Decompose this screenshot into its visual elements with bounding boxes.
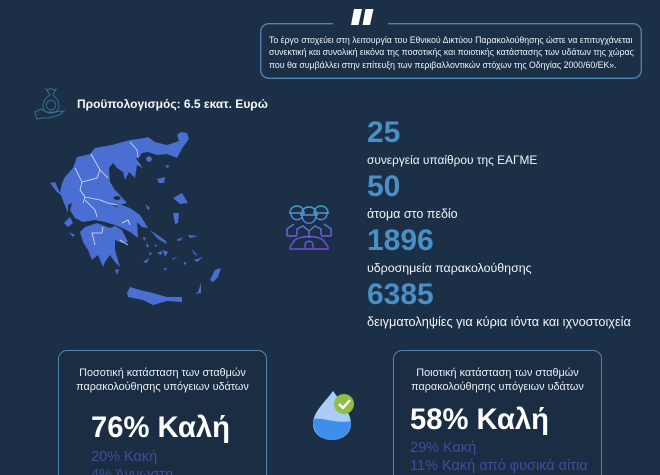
panel: quantitative status [58, 350, 267, 475]
Lemnos [157, 177, 165, 183]
secondary figures [91, 449, 173, 475]
number 50: 50 [367, 170, 400, 203]
icon: money bag in hand [34, 88, 66, 120]
panel heading: παρακολούθησης υπόγειων υδάτων [76, 381, 249, 393]
Lefkada and Kefalonia [64, 217, 73, 227]
Crete [127, 287, 182, 305]
panel heading [411, 367, 584, 393]
label: υδροσημεία παρακολούθησης [367, 261, 532, 275]
panel heading [76, 367, 249, 393]
number 6385: 6385 [367, 278, 434, 311]
panel heading: παρακολούθησης υπόγειων υδάτων [411, 381, 584, 393]
quote panel [260, 23, 642, 79]
panel outline [260, 23, 642, 79]
icon: field crew [286, 205, 332, 250]
stat: monitoring water points [367, 224, 532, 275]
label: συνεργεία υπαίθρου της ΕΑΓΜΕ [367, 153, 537, 167]
stat: people in field [367, 170, 458, 221]
map of Greece [50, 132, 221, 305]
mainland [60, 132, 189, 238]
Thasos [146, 156, 152, 162]
main figure: 76% Καλή [91, 412, 230, 444]
number 1896: 1896 [367, 224, 434, 257]
budget heading: Προϋπολογισμός: 6.5 εκατ. Ευρώ [77, 97, 268, 111]
main figure: 58% Καλή [410, 404, 549, 436]
quote text [269, 34, 634, 70]
Kythira [115, 269, 119, 275]
label: άτομα στο πεδίο [367, 207, 458, 221]
secondary figures [410, 440, 588, 474]
secondary figures: 29% Κακή [410, 440, 476, 456]
quote text: Το έργο στοχεύει στη λειτουργία του Εθνικού Δικτύου Παρακολούθησης ώστε να επιτυγχάνεται [269, 34, 632, 44]
Zakynthos [69, 232, 75, 237]
quote text: συνεκτική και συνολική εικόνα της ποσοτικής και ποιοτικής κατάστασης των υδάτων της χώρας [269, 47, 634, 57]
stat: field teams [367, 116, 537, 167]
Aegean islands [165, 165, 170, 168]
icon: quotation mark [351, 9, 374, 25]
panel heading: Ποιοτική κατάσταση των σταθμών [416, 367, 579, 379]
secondary figures: 11% Κακή από φυσικά αίτια [410, 458, 588, 474]
Peloponnese [80, 223, 128, 267]
panel heading: Ποσοτική κατάσταση των σταθμών [79, 367, 246, 379]
Chios [173, 213, 179, 224]
Evia [113, 202, 148, 228]
Pagasetic gulf [114, 196, 120, 200]
panel: qualitative status [393, 350, 602, 475]
stat: samplings [367, 278, 631, 329]
Rhodes [210, 268, 221, 282]
quote text: που θα συμβάλλει στην επίτευξη των περιβαλλοντικών στόχων της Οδηγίας 2000/60/ΕΚ». [269, 60, 617, 70]
Corfu [50, 182, 61, 195]
secondary figures: 20% Κακή [91, 449, 157, 465]
label: δειγματοληψίες για κύρια ιόντα και ιχνοστοιχεία [367, 314, 631, 329]
number 25: 25 [367, 116, 400, 149]
Lesvos [173, 193, 188, 204]
icon: water drop with check [312, 391, 354, 440]
